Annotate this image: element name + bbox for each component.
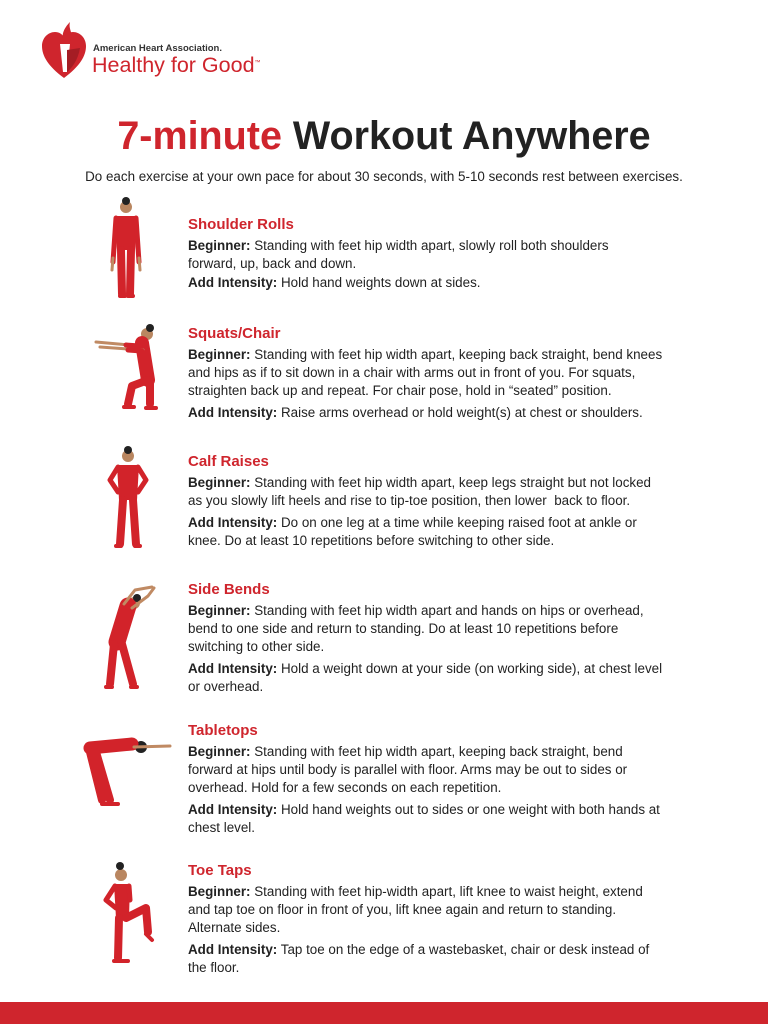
section: toe taps: Add Intensity: Tap toe on the edge of a wastebasket, chair or desk instead of [188,942,649,957]
icon: side bends figure [106,587,154,687]
section: side bends: or overhead. [188,679,263,694]
section: shoulder rolls: Add Intensity: Hold hand weights down at sides. [188,275,480,290]
section: side bends: bend to one side and return to standing. Do at least 10 repetitions before [188,621,618,636]
section: calf raises [188,453,651,548]
section: toe taps: the floor. [188,960,239,975]
section: toe taps: Toe Taps [188,862,252,879]
title: 7-minute Workout Anywhere [117,114,651,158]
section: tabletops: chest level. [188,820,255,835]
section: squats [188,325,662,420]
section: calf raises: knee. Do at least 10 repetitions before switching to other side. [188,533,554,548]
section: toe taps: Alternate sides. [188,920,280,935]
section: shoulder rolls: Shoulder Rolls [188,216,294,233]
logo [42,22,261,78]
section: tabletops: Add Intensity: Hold hand weights out to sides or one weight with both hands at [188,802,660,817]
section: tabletops [188,722,660,835]
section: tabletops: Beginner: Standing with feet hip width apart, keeping back straight, bend [188,744,623,759]
section: shoulder rolls: forward, up, back and down. [188,256,356,271]
logo: Healthy for Good™ [92,53,261,77]
section: tabletops: Tabletops [188,722,258,739]
section: squats: Add Intensity: Raise arms overhead or hold weight(s) at chest or shoulders. [188,405,643,420]
icon: heart torch [42,22,86,78]
section: squats: and hips as if to sit down in a chair with arms out in front of you. For squats, [188,365,635,380]
section: side bends: Side Bends [188,581,270,598]
subtitle: Do each exercise at your own pace for about 30 seconds, with 5-10 seconds rest between exercises. [85,169,683,184]
section: side bends: Beginner: Standing with feet hip width apart and hands on hips or overhead, [188,603,644,618]
section: shoulder rolls: Beginner: Standing with feet hip width apart, slowly roll both shoulders [188,238,609,253]
section: tabletops: forward at hips until body is parallel with floor. Arms may be out to sides or [188,762,627,777]
footer bar [0,1002,768,1024]
section: shoulder rolls [188,216,609,290]
icon: squats figure [96,324,156,408]
section: squats: Beginner: Standing with feet hip width apart, keeping back straight, bend knees [188,347,662,362]
section: toe taps: Beginner: Standing with feet hip-width apart, lift knee to waist height, extend [188,884,643,899]
section: toe taps [188,862,650,975]
section: calf raises: Add Intensity: Do on one leg at a time while keeping raised foot at ankle or [188,515,637,530]
icon: toe taps figure [106,862,152,961]
section: side bends: switching to other side. [188,639,324,654]
section: calf raises: Calf Raises [188,453,269,470]
section: tabletops: overhead. Hold for a few seconds on each repetition. [188,780,501,795]
section: calf raises: Beginner: Standing with feet hip width apart, keep legs straight but not locked [188,475,651,490]
logo text: American Heart Association. [93,43,222,54]
section: squats: Squats/Chair [188,325,281,342]
icon: shoulder rolls figure [112,197,140,296]
section: toe taps: and tap toe on floor in front of you, lift knee again and return to standing. [188,902,616,917]
section: side bends: Add Intensity: Hold a weight down at your side (on working side), at chest level [188,661,662,676]
section: squats: straighten back up and repeat. For chair pose, hold in “seated” position. [188,383,612,398]
section: side bends [188,581,662,694]
section: calf raises: as you slowly lift heels and rise to tip-toe position, then lower back to floor. [188,493,630,508]
icon: tabletops figure [90,741,170,804]
icon: calf raises figure [110,446,146,546]
